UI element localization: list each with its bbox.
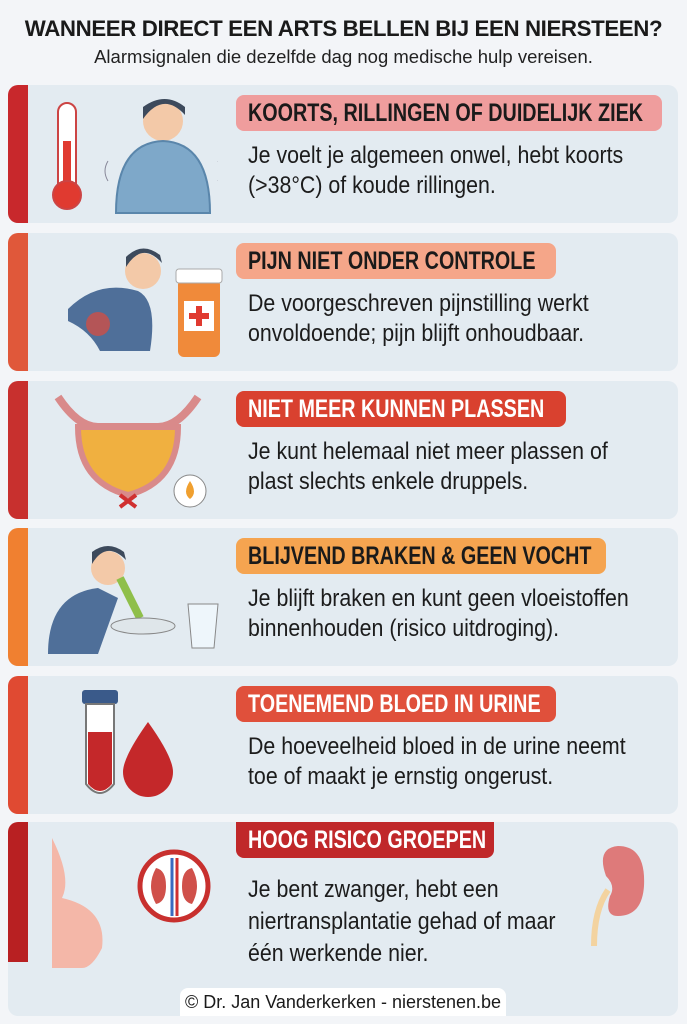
panel: bloed [8, 676, 678, 814]
text: één werkende nier. [248, 940, 429, 967]
text: onvoldoende; pijn blijft onhoudbaar. [248, 320, 584, 347]
heading: BLIJVEND BRAKEN & GEEN VOCHT [248, 542, 591, 570]
text [248, 290, 589, 347]
text: niertransplantatie gehad of maar [248, 908, 556, 935]
icon: pregnant person and kidneys [52, 838, 210, 968]
text [248, 438, 608, 495]
icon: bladder [54, 394, 206, 509]
text: Je blijft braken en kunt geen vloeistoffen [248, 585, 629, 612]
heading [236, 243, 556, 279]
panel: plassen [8, 381, 678, 519]
heading: NIET MEER KUNNEN PLASSEN [248, 395, 544, 423]
text: Je voelt je algemeen onwel, hebt koorts [248, 142, 623, 169]
heading: PIJN NIET ONDER CONTROLE [248, 247, 535, 275]
text: Je bent zwanger, hebt een [248, 876, 499, 903]
panel: hoog risico [8, 822, 678, 1016]
text: Je kunt helemaal niet meer plassen of [248, 438, 608, 465]
text: plast slechts enkele druppels. [248, 468, 528, 495]
heading: HOOG RISICO GROEPEN [248, 826, 486, 854]
panel: braken [8, 528, 678, 666]
text: De voorgeschreven pijnstilling werkt [248, 290, 589, 317]
text: toe of maakt je ernstig ongerust. [248, 763, 553, 790]
icon: vomiting person and water glass [48, 546, 218, 654]
icon: blood tube and drop [82, 690, 173, 797]
icon: thermometer and shivering person [52, 99, 218, 214]
text [248, 733, 626, 790]
panel: koorts [8, 85, 678, 223]
icon: single kidney [591, 846, 644, 946]
footer credit [180, 988, 506, 1016]
icon: person in pain and medicine bottle [68, 248, 222, 357]
panel: pijn [8, 233, 678, 371]
text: De hoeveelheid bloed in de urine neemt [248, 733, 626, 760]
text [248, 876, 556, 967]
subtitle: Alarmsignalen die dezelfde dag nog medische hulp vereisen. [94, 46, 593, 67]
heading: TOENEMEND BLOED IN URINE [248, 690, 541, 718]
text [248, 142, 623, 199]
heading: KOORTS, RILLINGEN OF DUIDELIJK ZIEK [248, 99, 643, 127]
text: binnenhouden (risico uitdroging). [248, 615, 559, 642]
text: (>38°C) of koude rillingen. [248, 172, 496, 199]
footer credit: © Dr. Jan Vanderkerken - nierstenen.be [185, 992, 501, 1012]
heading [236, 391, 566, 427]
title: WANNEER DIRECT EEN ARTS BELLEN BIJ EEN NIERSTEEN? [25, 16, 662, 41]
text [248, 585, 629, 642]
